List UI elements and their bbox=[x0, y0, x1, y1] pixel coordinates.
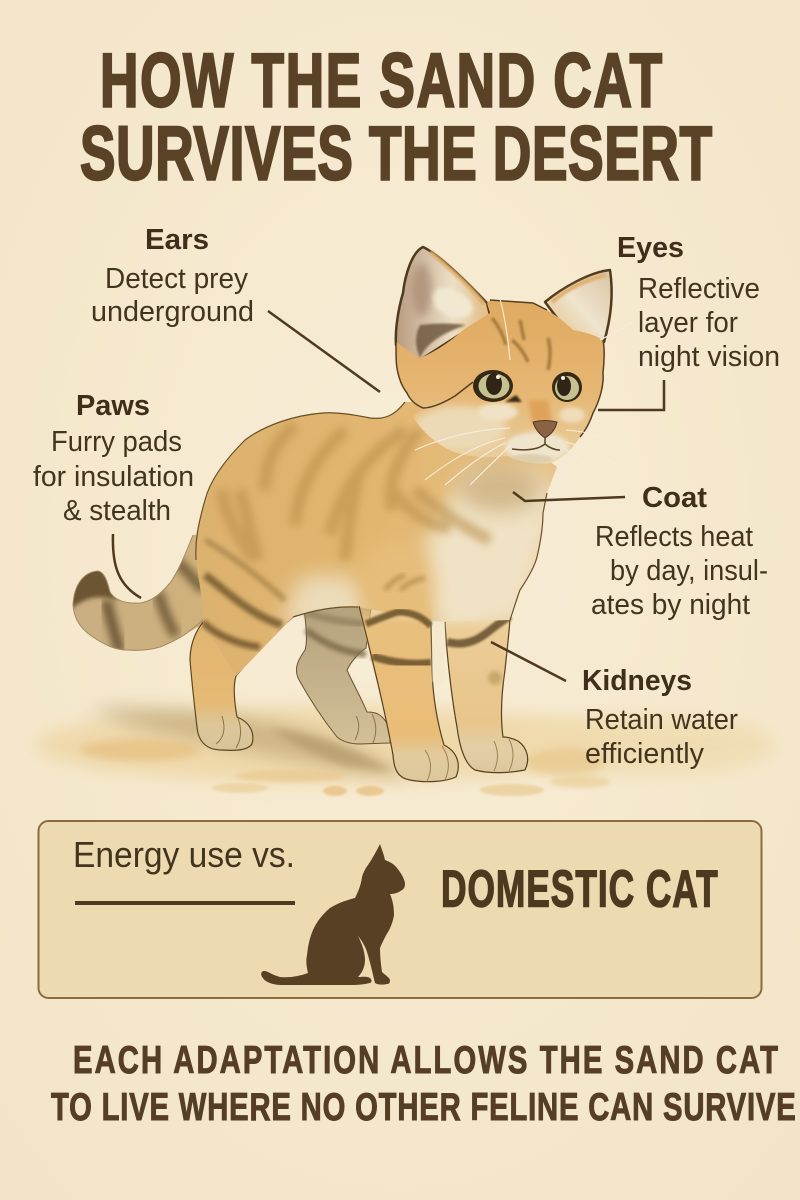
gap between the front legs bbox=[432, 622, 444, 682]
callout: eyes: Eyes bbox=[617, 232, 684, 264]
callout: coat bbox=[513, 482, 768, 621]
cheek cream bbox=[414, 406, 506, 450]
blank value line bbox=[75, 901, 295, 905]
eye: left bbox=[473, 370, 522, 402]
nose and mouth bbox=[512, 420, 560, 450]
whiskers bbox=[415, 275, 632, 485]
body bbox=[196, 400, 560, 676]
ear base fur shadow bbox=[416, 324, 466, 358]
callout: coat: ates by night bbox=[591, 589, 750, 621]
illustration: sand cat bbox=[60, 247, 632, 782]
callout: coat: Reflects heat bbox=[595, 521, 753, 553]
eye: right bbox=[552, 372, 582, 402]
callout: kidneys: efficiently bbox=[585, 738, 704, 770]
panel label: Energy use vs. bbox=[73, 834, 295, 875]
callout: paws bbox=[33, 390, 194, 598]
callout: kidneys: Retain water bbox=[585, 704, 738, 736]
panel: energy use vs. domestic cat bbox=[38, 821, 762, 998]
callout: ears bbox=[91, 224, 380, 392]
callout: ears: underground bbox=[91, 296, 254, 328]
callout: coat: Coat bbox=[642, 482, 707, 514]
callout: paws: Paws bbox=[76, 390, 150, 422]
callout: eyes: Reflective bbox=[638, 273, 760, 305]
body outline bbox=[196, 402, 547, 620]
forehead marks bbox=[492, 318, 550, 370]
icon: domestic cat silhouette bbox=[261, 844, 405, 985]
closing statement bbox=[51, 1039, 796, 1129]
callout: paws: for insulation bbox=[33, 461, 194, 493]
nose bridge bbox=[528, 400, 552, 422]
head shape bbox=[396, 300, 604, 464]
callout: eyes: night vision bbox=[638, 341, 780, 373]
body stripes bbox=[222, 425, 490, 560]
shoulder bbox=[359, 540, 431, 620]
near front leg bbox=[356, 596, 458, 782]
callout: kidneys: Kidneys bbox=[582, 665, 692, 697]
title: HOW THE SAND CAT bbox=[100, 38, 662, 123]
title: SURVIVES THE DESERT bbox=[80, 111, 712, 196]
head outline bbox=[396, 300, 604, 437]
callout: ears: Detect prey bbox=[105, 263, 248, 295]
callout: kidneys bbox=[491, 642, 738, 770]
closing statement: TO LIVE WHERE NO OTHER FELINE CAN SURVIVE bbox=[51, 1086, 796, 1129]
muzzle bbox=[505, 432, 569, 462]
tail outline bbox=[73, 535, 203, 650]
closing statement: EACH ADAPTATION ALLOWS THE SAND CAT bbox=[73, 1039, 778, 1082]
far hind leg bbox=[296, 600, 390, 744]
tail bbox=[74, 534, 204, 650]
rear leg bbox=[190, 590, 293, 750]
callout: eyes: layer for bbox=[638, 307, 738, 339]
title bbox=[80, 38, 712, 196]
head bbox=[390, 247, 632, 485]
comparison label: DOMESTIC CAT bbox=[441, 861, 718, 918]
ear: left bbox=[396, 247, 490, 360]
sandy ground under the cat bbox=[35, 707, 775, 796]
callout: paws: & stealth bbox=[63, 495, 171, 527]
callout: eyes bbox=[598, 232, 780, 410]
callout: paws: Furry pads bbox=[51, 426, 182, 458]
far front leg bbox=[445, 605, 528, 773]
callout: ears: Ears bbox=[145, 224, 209, 256]
chest and belly bbox=[420, 470, 560, 640]
callout: coat: by day, insul- bbox=[610, 555, 768, 587]
ear: right bbox=[545, 270, 612, 342]
